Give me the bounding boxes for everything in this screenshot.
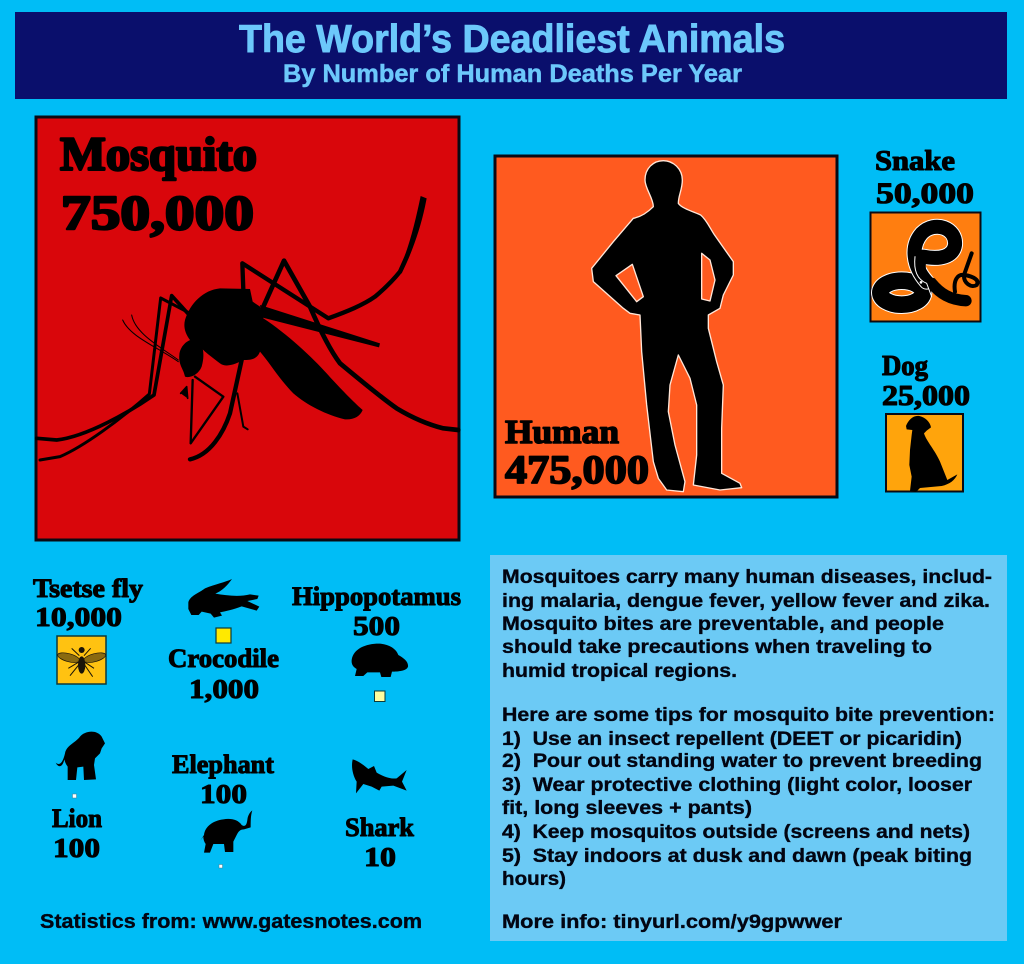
shark count: 10 [364, 842, 396, 872]
dog stat [882, 351, 970, 492]
shark label: Shark [345, 813, 415, 842]
elephant label: Elephant [172, 750, 274, 779]
icon: lion [56, 732, 105, 780]
elephant square [219, 864, 222, 868]
list: prevention tips: 4) Keep mosquitos outside (screens and nets) [502, 821, 970, 843]
subtitle: By Number of Human Deaths Per Year [283, 60, 742, 88]
snake box [870, 212, 980, 322]
paragraph: diseases [502, 566, 992, 682]
snake label: Snake [875, 146, 955, 177]
list: prevention tips: Here are some tips for mosquito bite prevention: [502, 704, 995, 726]
more info link: More info: tinyurl.com/y9gpwwer [502, 911, 842, 933]
hippopotamus label: Hippopotamus [292, 582, 461, 611]
panel: mosquito [36, 117, 459, 540]
snake stat [870, 146, 980, 322]
icon: snake [880, 227, 978, 305]
dog count: 25,000 [882, 381, 970, 412]
panel: information [490, 555, 1007, 941]
human label: Human [505, 414, 619, 451]
human count: 475,000 [505, 447, 649, 492]
list: prevention tips: hours) [502, 868, 566, 890]
icon: shark [352, 759, 407, 793]
crocodile label: Crocodile [168, 644, 279, 673]
lion stat [52, 732, 105, 863]
title: The World’s Deadliest Animals [239, 18, 785, 61]
paragraph: diseases: ing malaria, dengue fever, yellow fever and zika. [502, 590, 990, 612]
lion count: 100 [53, 833, 100, 863]
list: prevention tips: fit, long sleeves + pants) [502, 797, 752, 819]
elephant count: 100 [200, 779, 247, 809]
crocodile square [216, 628, 231, 643]
dog label: Dog [882, 351, 928, 382]
hippopotamus square [374, 691, 385, 702]
crocodile stat [168, 579, 279, 704]
mosquito label: Mosquito [60, 128, 257, 181]
source note: Statistics from: www.gatesnotes.com [40, 911, 422, 933]
list: prevention tips: 2) Pour out standing water to prevent breeding [502, 750, 982, 772]
paragraph: diseases: humid tropical regions. [502, 660, 737, 682]
hippopotamus count: 500 [353, 611, 400, 641]
paragraph: diseases: should take precautions when traveling to [502, 636, 932, 658]
crocodile count: 1,000 [189, 674, 259, 704]
dog box [886, 414, 963, 492]
tsetse label: Tsetse fly [33, 574, 143, 603]
icon: hippopotamus [352, 644, 408, 677]
title banner [15, 12, 1007, 99]
lion square [72, 794, 76, 798]
paragraph: diseases: Mosquito bites are preventable, and people [502, 613, 944, 635]
icon: human silhouette [592, 161, 742, 492]
list: prevention tips: 1) Use an insect repellent (DEET or picaridin) [502, 728, 962, 750]
icon: mosquito silhouette [37, 196, 458, 460]
panel: human [495, 156, 837, 497]
lion label: Lion [52, 804, 103, 833]
icon: dog [906, 416, 957, 492]
tsetse fly stat [33, 574, 143, 684]
tsetse box [57, 636, 106, 684]
list: prevention tips: 5) Stay indoors at dusk and dawn (peak biting [502, 845, 972, 867]
icon: elephant [200, 810, 252, 853]
icon: crocodile [188, 579, 259, 618]
icon: fly [57, 647, 107, 677]
snake count: 50,000 [876, 177, 974, 210]
mosquito count: 750,000 [61, 185, 254, 240]
tsetse count: 10,000 [35, 602, 122, 632]
list: prevention tips [502, 704, 995, 890]
shark stat [345, 759, 415, 872]
elephant stat [172, 750, 274, 868]
hippopotamus stat [292, 582, 461, 702]
paragraph: diseases: Mosquitoes carry many human diseases, includ- [502, 566, 992, 588]
list: prevention tips: 3) Wear protective clothing (light color, looser [502, 774, 972, 796]
